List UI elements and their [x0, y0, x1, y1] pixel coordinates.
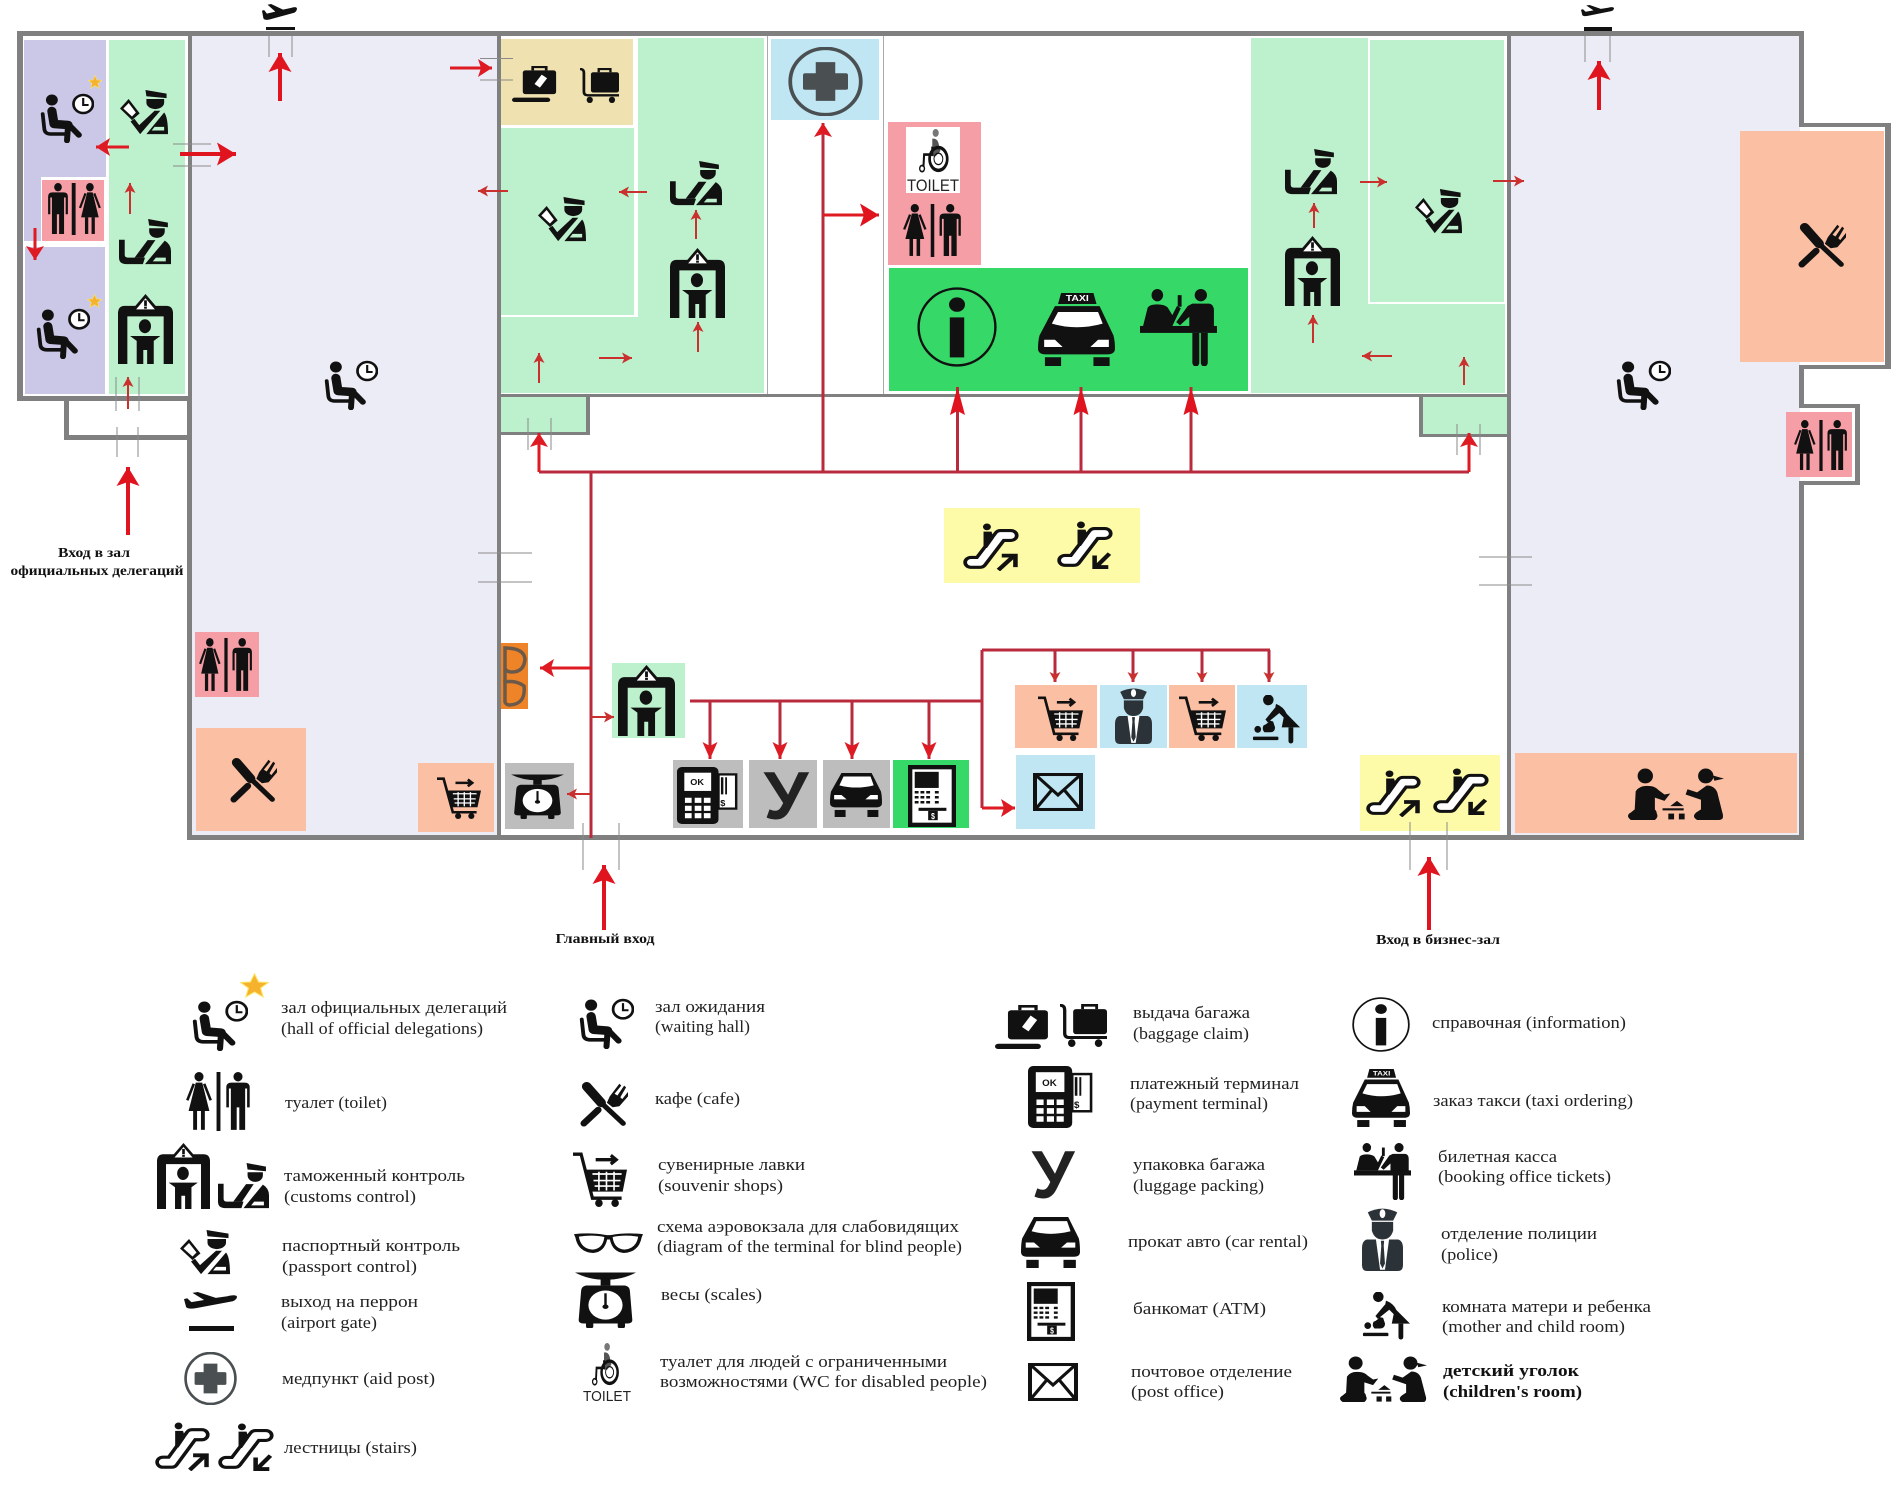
legend	[157, 974, 1652, 1470]
legend: souvenir shops	[573, 1154, 805, 1207]
door marks	[116, 36, 1610, 870]
icon: toilet right	[1795, 420, 1847, 471]
panel: terminal diagram for blind people	[500, 643, 528, 709]
icon: shop two	[1179, 698, 1226, 741]
legend: passport control: (passport control)	[282, 1257, 417, 1276]
icon: scanner right	[1285, 236, 1340, 306]
legend: stairs	[163, 1422, 417, 1470]
legend: souvenir shops: (souvenir shops)	[658, 1176, 783, 1195]
legend: booking office: (booking office tickets)	[1438, 1167, 1611, 1186]
icon: star upper	[88, 75, 102, 88]
legend: diagram for blind people: схема аэровокзала для слабовидящих	[657, 1217, 960, 1236]
legend: payment terminal	[1028, 1066, 1300, 1128]
panel: delegation toilet	[42, 180, 104, 241]
legend: toilet: туалет (toilet)	[285, 1093, 387, 1112]
legend: taxi ordering	[1352, 1069, 1633, 1127]
legend: booking office	[1354, 1143, 1611, 1200]
panel: right vestibule	[1422, 397, 1507, 434]
floor plan	[10, 4, 1891, 948]
legend: hall of official delegations	[195, 974, 507, 1048]
panel: delegation control zone	[109, 40, 185, 394]
legend: stairs: лестницы (stairs)	[284, 1438, 417, 1457]
legend: customs control	[157, 1143, 465, 1209]
legend: mother and child room: (mother and child room)	[1442, 1317, 1625, 1336]
panel: shop two	[1169, 685, 1235, 748]
icon: baggage cart	[580, 69, 619, 103]
legend: cafe: кафе (cafe)	[655, 1089, 740, 1108]
icon: taxi	[1038, 293, 1115, 366]
icon: stairs down right	[1441, 768, 1485, 813]
icon: scanner central	[670, 248, 725, 318]
legend: payment terminal: платежный терминал	[1130, 1074, 1300, 1093]
icon: customs right	[1285, 149, 1337, 194]
legend: diagram for blind people: (diagram of the terminal for blind people)	[657, 1237, 962, 1256]
arrows: main route network	[539, 123, 1469, 838]
panel: car rental	[823, 760, 890, 828]
panel: scales	[505, 763, 574, 829]
panel: atm	[893, 760, 969, 828]
icon: atm	[908, 765, 956, 827]
legend: baggage claim	[995, 1003, 1251, 1049]
legend: airport gate	[184, 1292, 418, 1332]
legend: WC for disabled people: возможностями (WC for disabled people)	[660, 1372, 987, 1391]
legend: car rental: прокат авто (car rental)	[1128, 1232, 1308, 1251]
legend: WC for disabled people	[583, 1343, 987, 1405]
icon: scales	[511, 774, 564, 819]
legend: taxi ordering: заказ такси (taxi ordering)	[1433, 1091, 1633, 1110]
white partitions	[24, 38, 638, 394]
icon: glasses on orange panel	[505, 648, 525, 705]
icon: toilet left hall	[200, 638, 252, 692]
icon: passport control right	[1415, 189, 1462, 233]
icon: shop one	[1038, 698, 1083, 741]
legend: police	[1362, 1209, 1597, 1271]
legend: police: (police)	[1441, 1245, 1498, 1264]
icon: cafe right	[1802, 225, 1846, 264]
legend: aid post	[186, 1353, 435, 1404]
panel: right cafe	[1740, 131, 1884, 362]
legend: children's room: (children's room)	[1443, 1382, 1582, 1401]
icon: customs delegation	[119, 219, 171, 264]
panel: passport room	[501, 128, 634, 315]
legend: waiting hall: (waiting hall)	[655, 1017, 750, 1036]
entrance label: delegations: Вход в зал	[58, 546, 130, 561]
panel: left hall toilet	[195, 632, 259, 697]
legend: booking office: билетная касса	[1438, 1147, 1557, 1166]
icon: baggage with tag	[512, 67, 556, 102]
legend: aid post: медпункт (aid post)	[282, 1369, 435, 1388]
legend: WC for disabled people: туалет для людей с ограниченными	[660, 1352, 947, 1371]
icon: luggage packing letter: У	[764, 758, 809, 834]
panel: children's room	[1515, 753, 1797, 833]
icon: police	[1115, 689, 1152, 744]
icon: passport control delegation	[120, 90, 168, 134]
panel: right toilet	[1786, 412, 1852, 477]
icon: passport control central	[538, 197, 586, 241]
icon: airplane right gate	[1581, 5, 1614, 16]
panel: disabled toilet sign	[906, 127, 960, 193]
icon: information	[919, 289, 995, 365]
legend: information: справочная (information)	[1432, 1013, 1626, 1032]
legend: waiting hall	[582, 997, 765, 1046]
panel: left hall cafe	[196, 728, 306, 831]
panel: delegation hall lower room	[25, 247, 105, 394]
icon: children	[1628, 769, 1724, 820]
panel: left vestibule	[501, 397, 586, 432]
icon: toilet central	[904, 204, 961, 257]
panel: post office	[1016, 755, 1095, 829]
legend: customs control: таможенный контроль	[284, 1166, 465, 1185]
icon: aid post	[790, 48, 861, 115]
legend: mother and child room: комната матери и ребенка	[1442, 1297, 1652, 1316]
icon: post	[1035, 775, 1081, 809]
icon: payment terminal	[677, 767, 736, 824]
entrance label: delegations	[10, 546, 184, 579]
legend: diagram for blind people	[574, 1217, 962, 1256]
legend: scales	[575, 1273, 762, 1328]
panel: delegation hall upper room	[24, 40, 106, 241]
legend: post office: (post office)	[1131, 1382, 1224, 1401]
panel: stairs right	[1360, 755, 1500, 831]
icon: delegation waiting upper	[43, 94, 93, 140]
legend: airport gate: выход на перрон	[281, 1292, 418, 1311]
legend: ATM	[1027, 1282, 1266, 1341]
icon: toilet delegation	[48, 183, 100, 235]
entrance label: delegations: официальных делегаций	[10, 564, 184, 579]
panel: police	[1100, 685, 1167, 748]
icon: wheelchair	[920, 129, 947, 172]
icon: customs central	[670, 161, 722, 205]
icon: scanner main hall	[618, 665, 675, 736]
icon: star lower	[87, 294, 102, 307]
panel: luggage packing	[749, 760, 817, 828]
panel: central arrivals control zone	[499, 38, 764, 393]
icon: delegation waiting lower	[39, 310, 89, 356]
legend: children's room	[1340, 1356, 1582, 1402]
legend: mother and child room	[1363, 1292, 1652, 1340]
legend: luggage packing: (luggage packing)	[1133, 1176, 1264, 1195]
icon: airplane left gate	[262, 4, 297, 20]
entrance label: main: Главный вход	[556, 932, 654, 947]
panel: main hall customs	[612, 663, 685, 738]
panel: toilets central	[888, 122, 981, 265]
legend: children's room: детский уголок	[1443, 1361, 1579, 1380]
arrows: local direction arrows	[35, 53, 1599, 930]
legend: cafe	[584, 1084, 740, 1123]
legend: souvenir shops: сувенирные лавки	[658, 1155, 805, 1174]
icon: cafe left hall	[234, 760, 277, 799]
icon: shop left hall	[437, 779, 481, 819]
legend: baggage claim: выдача багажа	[1133, 1003, 1251, 1022]
building walls	[17, 31, 1891, 840]
icon: stairs up central	[971, 523, 1015, 570]
legend: waiting hall: зал ожидания	[655, 997, 765, 1016]
legend: passport control	[180, 1230, 460, 1276]
panel: payment terminal	[673, 760, 743, 828]
icon: waiting hall right	[1619, 362, 1670, 408]
entrance label: business: Вход в бизнес-зал	[1376, 933, 1500, 948]
icon: scanner delegation	[118, 294, 173, 364]
legend: car rental	[1021, 1217, 1308, 1268]
panel: mother and child room	[1237, 685, 1307, 748]
legend: ATM: банкомат (ATM)	[1133, 1299, 1266, 1318]
legend: scales: весы (scales)	[661, 1285, 762, 1304]
icon: mother and child	[1253, 695, 1300, 744]
legend: toilet	[187, 1072, 387, 1131]
legend: payment terminal: (payment terminal)	[1130, 1094, 1268, 1113]
legend: hall of official delegations: зал официальных делегаций	[281, 998, 507, 1017]
legend: luggage packing: У	[1032, 1137, 1075, 1213]
legend: luggage packing	[1032, 1137, 1265, 1213]
legend: hall of official delegations: (hall of official delegations)	[281, 1019, 483, 1038]
legend: police: отделение полиции	[1441, 1224, 1597, 1243]
legend: luggage packing: упаковка багажа	[1133, 1155, 1265, 1174]
panel: information, taxi, tickets	[889, 268, 1248, 391]
legend: post office	[1030, 1362, 1292, 1401]
panel: aid post	[771, 39, 879, 120]
panel: right passport room outline	[1369, 39, 1505, 303]
legend: baggage claim: (baggage claim)	[1133, 1024, 1249, 1043]
panel: stairs central	[944, 508, 1140, 583]
left waiting hall floor	[192, 36, 498, 836]
icon: star	[241, 974, 268, 997]
legend: information	[1353, 998, 1626, 1051]
icon: waiting hall left	[327, 362, 377, 408]
legend: passport control: паспортный контроль	[282, 1236, 460, 1255]
legend: airport gate: (airport gate)	[281, 1313, 377, 1332]
legend: WC for disabled people: TOILET	[583, 1388, 631, 1405]
icon: ticket office	[1140, 289, 1217, 366]
gate bars	[266, 27, 1612, 31]
panel: left hall souvenir shop	[418, 763, 494, 832]
panel: shop one	[1015, 685, 1097, 748]
text: TOILET sign: TOILET	[907, 176, 959, 195]
panel: right control zone	[1251, 38, 1505, 393]
legend: customs control: (customs control)	[284, 1187, 416, 1206]
right waiting hall floor	[1510, 36, 1800, 836]
legend: post office: почтовое отделение	[1131, 1362, 1292, 1381]
icon: stairs down central	[1065, 521, 1109, 567]
icon: stairs up right	[1374, 770, 1418, 816]
icon: car rental	[830, 773, 882, 817]
panel: baggage claim	[501, 39, 633, 125]
